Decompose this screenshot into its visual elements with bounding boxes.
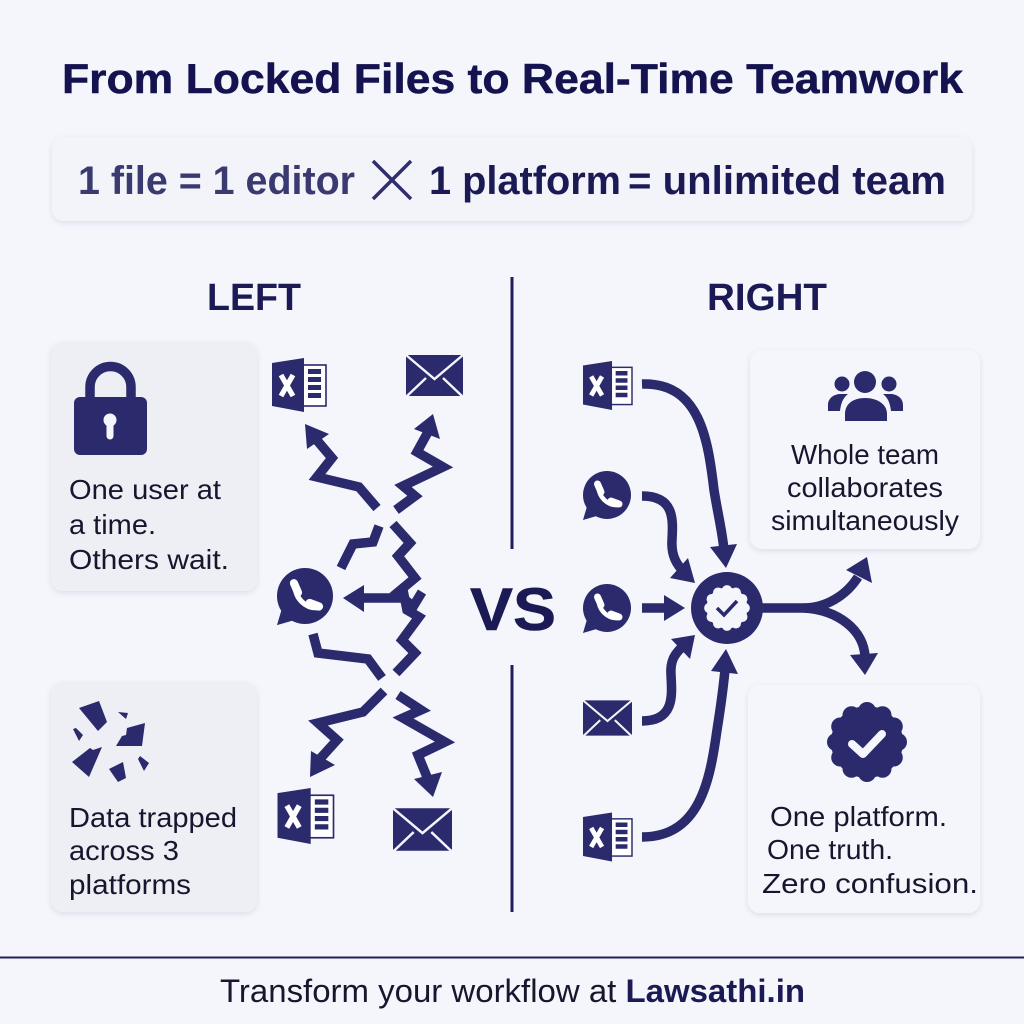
text: platform caption: Zero confusion. <box>762 868 978 899</box>
center divider and versus label: VS <box>470 576 556 643</box>
text: shards caption: Data trapped <box>69 802 237 833</box>
text: platform caption: One truth. <box>767 834 893 865</box>
text: platform caption: One platform. <box>770 801 947 832</box>
broken path: below whatsapp <box>313 634 382 678</box>
footer rule <box>0 956 1024 958</box>
text: team caption: Whole team <box>791 439 939 470</box>
icon: mail bottom <box>393 808 452 851</box>
arrow: to excel bottom <box>310 691 384 777</box>
title: From Locked Files to Real-Time Teamwork <box>62 55 964 102</box>
formula bar <box>52 137 972 221</box>
arrow: whatsapp 2 to hub <box>642 595 685 621</box>
icon: verified badge <box>827 702 907 782</box>
arrow: whatsapp 1 to hub <box>642 496 695 583</box>
text: shards caption: across 3 <box>69 835 179 866</box>
formula: result: = unlimited team <box>628 159 946 203</box>
arrow: to whatsapp <box>343 524 415 612</box>
panel: data trapped <box>51 682 257 912</box>
arrow: to mail bottom <box>398 695 445 797</box>
arrow: excel 1 to hub <box>642 384 737 568</box>
panel: whole team <box>750 350 980 549</box>
icon: excel 1 <box>583 361 632 410</box>
heading: right: RIGHT <box>707 277 827 319</box>
diagram: scattered left side <box>272 355 463 851</box>
text: lock caption <box>69 474 229 575</box>
text: team caption: simultaneously <box>771 505 959 536</box>
text: lock caption: Others wait. <box>69 544 229 575</box>
icon: excel top <box>272 358 326 412</box>
icon: shattered shards <box>72 701 149 782</box>
diagram: unified right side <box>583 361 878 862</box>
formula: platform side: 1 platform <box>429 159 621 203</box>
footer text: Transform your workflow at Lawsathi.in <box>220 973 805 1009</box>
formula: locked side: 1 file = 1 editor <box>78 159 355 203</box>
text: lock caption: a time. <box>69 509 156 540</box>
arrow: hub to outputs <box>760 557 878 675</box>
icon: whatsapp 2 <box>583 584 631 633</box>
panel: one user at a time <box>51 342 257 591</box>
hub: verified circle <box>691 572 763 644</box>
icon: cross multiply <box>373 161 411 199</box>
panel: one platform <box>748 685 980 913</box>
text: shards caption <box>69 802 237 900</box>
icon: mail <box>583 700 632 736</box>
text: team caption <box>771 439 959 536</box>
icon: excel 2 <box>583 812 632 862</box>
arrow: excel 2 to hub <box>642 649 738 837</box>
broken path: center squiggle <box>396 590 419 673</box>
text: shards caption: platforms <box>69 869 191 900</box>
arrow: mail to hub <box>642 635 695 721</box>
text: team caption: collaborates <box>787 472 943 503</box>
arrow: to excel top <box>305 424 377 508</box>
icon: padlock <box>74 366 147 455</box>
icon: mail top <box>406 355 463 396</box>
text: lock caption: One user at <box>69 474 221 505</box>
icon: whatsapp <box>277 568 333 625</box>
icon: team <box>828 371 903 421</box>
arrow: to mail top <box>396 414 443 510</box>
text: platform caption <box>762 801 978 899</box>
broken path: center stub <box>408 592 422 615</box>
heading: left: LEFT <box>207 277 301 319</box>
icon: whatsapp 1 <box>583 471 631 520</box>
broken path: near whatsapp <box>341 526 379 568</box>
icon: excel bottom <box>278 788 334 844</box>
